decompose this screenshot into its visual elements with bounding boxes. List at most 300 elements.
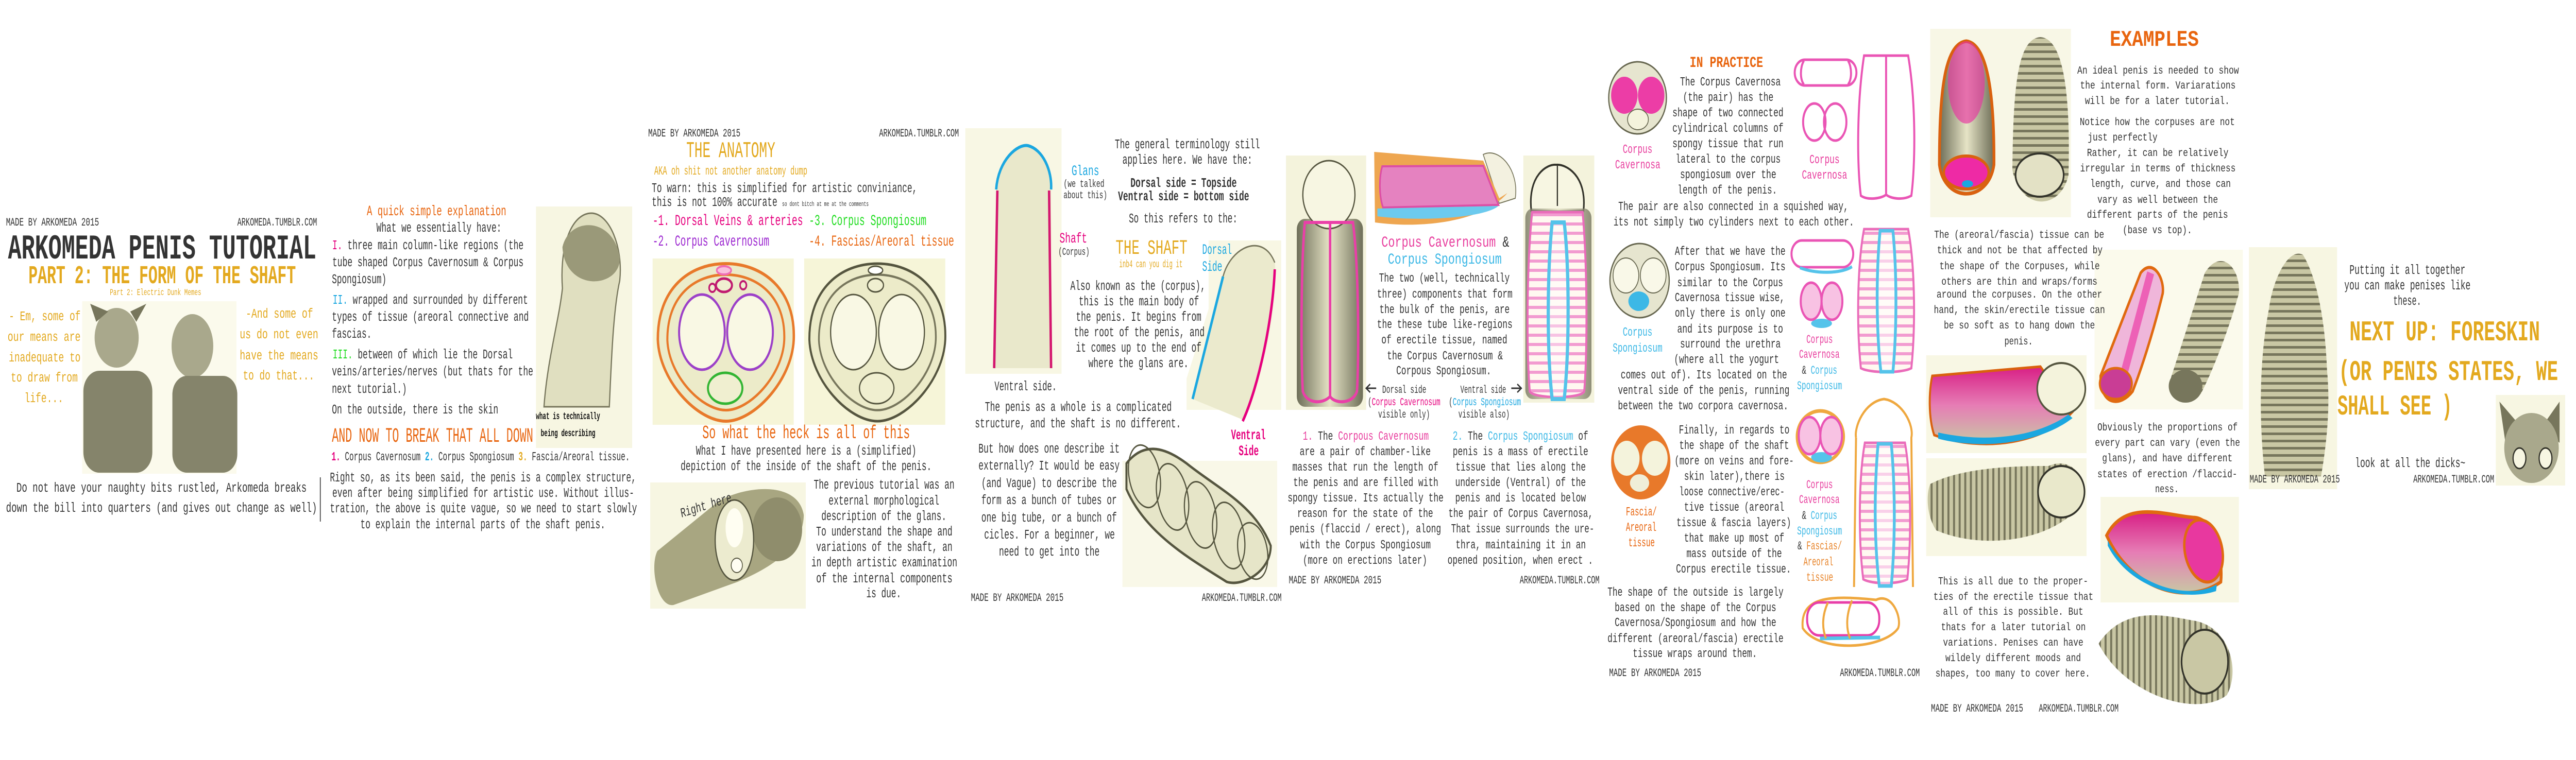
text: proportions: glans), and have different bbox=[2102, 452, 2232, 465]
example pair 2 bbox=[1926, 355, 2087, 556]
diagram: fascia section bbox=[1611, 425, 1670, 499]
definition: this is the main body of bbox=[1079, 295, 1199, 309]
text: ideal: vary as well between the bbox=[2097, 194, 2218, 206]
text: together: these. bbox=[2393, 294, 2421, 309]
definition: where the glans are. bbox=[1089, 356, 1189, 371]
credit line: ARKOMEDA.TUMBLR.COM bbox=[2039, 702, 2119, 715]
paragraph: in depth artistic examination bbox=[811, 556, 957, 571]
heading: Corpus Spongiosum bbox=[1388, 252, 1502, 269]
panel: corpus cavernosum and spongiosum bbox=[1286, 152, 1600, 587]
label: dorsal side bbox=[1368, 384, 1440, 421]
text: tissue: hand, the skin/erectile tissue can bbox=[1934, 304, 2105, 317]
text: proportions: every part can vary (even the bbox=[2095, 437, 2240, 450]
diagram: spongiosum section bbox=[1610, 244, 1669, 318]
text: proportions: Obviously the proportions of bbox=[2097, 421, 2238, 434]
text: ideal: An ideal penis is needed to show bbox=[2077, 64, 2239, 77]
text: cavernosa: (the pair) has the bbox=[1683, 91, 1773, 105]
text: spongiosum: (where all the yogurt bbox=[1674, 353, 1779, 367]
label: Corpus bbox=[1623, 326, 1652, 340]
right speech text: have the means bbox=[240, 349, 318, 364]
title: ARKOMEDA PENIS TUTORIAL bbox=[8, 230, 316, 269]
label: ventral side: visible also) bbox=[1459, 408, 1510, 421]
caption: what is technically bbox=[536, 411, 600, 423]
schematic: full layered form bbox=[1854, 399, 1913, 587]
numbered paragraph 1: the penis and are filled with bbox=[1293, 476, 1438, 490]
credit line: ARKOMEDA.TUMBLR.COM bbox=[1520, 574, 1600, 587]
text: cavernosa bbox=[1614, 76, 1854, 230]
text: spongiosum: Corpus Spongiosum. Its bbox=[1675, 261, 1786, 274]
warning: so dont bitch at me at the comments bbox=[782, 201, 869, 208]
paragraph: tration, the above is quite vague, so we need to start slowly bbox=[330, 502, 637, 516]
intro paragraph bbox=[6, 481, 317, 516]
numbered paragraph 1: 1. The Corpous Cavernosum bbox=[1303, 430, 1429, 444]
panel: the shaft bbox=[965, 128, 1282, 604]
diagram: ventral side view bbox=[965, 128, 1061, 374]
text: ideal: length, curve, and those can bbox=[2090, 178, 2231, 191]
text: fascia: tissue wraps around them. bbox=[1633, 647, 1757, 661]
intro text: The two (well, technically bbox=[1379, 272, 1510, 286]
text: tissue: penis. bbox=[2004, 335, 2033, 348]
text: fascia: Corpus erectile tissue. bbox=[1676, 563, 1791, 577]
text: fascia: different (areoral/fascia) erectile bbox=[1607, 632, 1784, 646]
labels: Glans bbox=[1072, 163, 1099, 180]
text: spongiosum: After that we have the bbox=[1675, 245, 1786, 259]
text: spongiosum: Cavernosa tissue wise, bbox=[1675, 291, 1785, 305]
label: dorsal side: Dorsal side bbox=[1382, 384, 1426, 396]
label: & Corpus bbox=[1802, 510, 1837, 523]
numbered explanation: fascias. bbox=[332, 327, 371, 342]
text: together bbox=[2344, 263, 2470, 309]
credit line: MADE BY ARKOMEDA 2015 bbox=[648, 127, 740, 140]
legend: -4. Fascias/Areoral tissue bbox=[809, 234, 954, 251]
label: Corpus bbox=[1809, 153, 1840, 167]
definition bbox=[975, 279, 1206, 431]
description bbox=[681, 444, 931, 474]
label: Corpus bbox=[1806, 334, 1833, 347]
heading: THE ANATOMY bbox=[686, 138, 775, 164]
caption: look at all the dicks~ bbox=[2355, 456, 2465, 471]
text: spongiosum: between the two corpora cavernosa. bbox=[1618, 400, 1788, 413]
paragraph: variations of the shaft, an bbox=[816, 540, 953, 555]
numbered paragraph 1: reason for the state of the bbox=[1297, 507, 1433, 521]
text: fascia: mass outside of the bbox=[1686, 547, 1782, 561]
numbered paragraph 2 bbox=[1448, 430, 1594, 568]
schematic: ring with fascia bbox=[1797, 411, 1843, 462]
text: tissue bbox=[1934, 229, 2105, 348]
intro text: three) components that form bbox=[1377, 288, 1513, 302]
intro text bbox=[1377, 272, 1513, 378]
diagram: side view bbox=[1187, 240, 1281, 421]
terminology: applies here. We have the: bbox=[1123, 153, 1252, 168]
example pair 4 bbox=[2098, 497, 2239, 704]
text: fascia: Finally, in regards to bbox=[1679, 424, 1789, 438]
text: spongiosum bbox=[1618, 245, 1789, 413]
label bbox=[1615, 143, 1660, 172]
text: closing: ties of the erectile tissue that bbox=[1934, 591, 2093, 603]
text: ideal: Rather, it can be relatively bbox=[2087, 147, 2228, 160]
numbered explanation: III. between of which lie the Dorsal bbox=[333, 348, 513, 362]
schematic: capsule and ring bbox=[1795, 60, 1856, 141]
text: spongiosum: surround the urethra bbox=[1680, 338, 1781, 352]
credit line: MADE BY ARKOMEDA 2015 bbox=[971, 592, 1063, 604]
text: spongiosum: only there is only one bbox=[1675, 307, 1786, 321]
text: cavernosa: length of the penis. bbox=[1677, 184, 1777, 198]
arrow: dorsal bbox=[1366, 384, 1376, 392]
legend bbox=[653, 213, 954, 251]
definition: structure, and the shaft is no different. bbox=[975, 417, 1181, 431]
text: ideal: the internal form. Variarations bbox=[2080, 79, 2235, 92]
numbered explanation: I. three main column-like regions (the bbox=[332, 238, 523, 253]
text: ideal bbox=[2077, 64, 2239, 237]
text: tissue: thick and not be that affected by bbox=[1937, 244, 2103, 257]
credit line bbox=[1289, 574, 1600, 587]
text: spongiosum: similar to the Corpus bbox=[1677, 277, 1783, 290]
small subtitle: Part 2: Electric Dunk Memes bbox=[110, 287, 201, 298]
heading: break down: AND NOW TO BREAK THAT ALL DOWN bbox=[332, 425, 533, 448]
text: fascia: Cavernosa/Spongiosum and how the bbox=[1615, 616, 1776, 630]
credit line: MADE BY ARKOMEDA 2015 bbox=[6, 216, 99, 229]
left speech text: to draw from bbox=[11, 371, 78, 386]
label: dorsal side: Side bbox=[1202, 259, 1222, 275]
numbered paragraph 1: are a pair of chamber-like bbox=[1300, 445, 1431, 459]
numbered paragraph 2: underside (Ventral) of the bbox=[1455, 476, 1586, 490]
left speech text: our means are bbox=[8, 330, 80, 345]
terminology: Dorsal side = Topside bbox=[1130, 176, 1236, 191]
question paragraph bbox=[978, 442, 1120, 560]
label: Spongiosum bbox=[1797, 525, 1842, 539]
numbered paragraph 2: penis is a mass of erectile bbox=[1453, 445, 1588, 459]
paragraph: The previous tutorial was an bbox=[814, 478, 955, 493]
numbered paragraph 1 bbox=[1287, 430, 1444, 568]
label: Cavernosa bbox=[1802, 169, 1848, 183]
numbered paragraph 1: penis (flaccid / erect), along bbox=[1290, 523, 1441, 537]
label: Fascia/ bbox=[1626, 506, 1657, 520]
text: fascia: that make up most of bbox=[1684, 532, 1784, 546]
definition: the penis. It begins from bbox=[1076, 310, 1201, 325]
text: ideal: different parts of the penis bbox=[2087, 209, 2228, 221]
left speech text: life... bbox=[24, 391, 63, 406]
numbered paragraph 1: spongy tissue. Its actually the bbox=[1287, 492, 1444, 506]
text: ideal: (base vs top). bbox=[2123, 224, 2192, 237]
panel: title and introduction bbox=[6, 216, 320, 522]
heading bbox=[1381, 235, 1510, 269]
paragraph bbox=[811, 478, 957, 601]
labels bbox=[1058, 163, 1107, 258]
label: dorsal side: visible only) bbox=[1378, 408, 1430, 421]
numbered paragraph 1: with the Corpus Spongiosum bbox=[1300, 539, 1431, 552]
schematic: cavernosa outline bbox=[1858, 56, 1914, 199]
caption: being describing bbox=[541, 428, 595, 440]
intro text: of erectile tissue, named bbox=[1381, 334, 1507, 348]
label: Areoral bbox=[1804, 556, 1833, 569]
caption bbox=[536, 411, 600, 440]
text: fascia: loose connective/erec- bbox=[1679, 486, 1785, 499]
label bbox=[1802, 153, 1848, 183]
numbered paragraph 2: thra, maintaining it in an bbox=[1455, 539, 1586, 552]
label: Corpus bbox=[1623, 143, 1652, 157]
arrow: ventral bbox=[1511, 384, 1521, 392]
credit line bbox=[6, 216, 317, 229]
numbered paragraph 1: (more on erections later) bbox=[1303, 554, 1427, 568]
labels: Shaft bbox=[1059, 231, 1087, 247]
paragraph: even after being simplified for artistic use. Without illus- bbox=[332, 486, 634, 501]
credit line: ARKOMEDA.TUMBLR.COM bbox=[1840, 667, 1920, 680]
paragraph bbox=[330, 471, 637, 532]
credit line: MADE BY ARKOMEDA 2015 bbox=[2250, 473, 2340, 486]
sketch: finished form bbox=[2249, 247, 2337, 489]
numbered paragraph 2: 2. The Corpus Spongiosum of bbox=[1453, 430, 1588, 444]
numbered explanation: next tutorial.) bbox=[332, 382, 407, 397]
heading: THE SHAFT bbox=[1115, 237, 1188, 260]
label bbox=[1797, 334, 1842, 393]
heading: IN PRACTICE bbox=[1690, 55, 1763, 72]
label bbox=[1797, 479, 1842, 585]
text: tissue: be so soft as to hang down the bbox=[1944, 319, 2095, 332]
text: cavernosa: spongy tissue that run bbox=[1672, 137, 1784, 151]
label bbox=[1613, 326, 1663, 356]
next up heading: (OR PENIS STATES, WE bbox=[2338, 356, 2558, 389]
text: ideal: will be for a later tutorial. bbox=[2085, 95, 2230, 108]
intro text: the bulk of the penis, are bbox=[1379, 303, 1510, 317]
numbered paragraph 2: opened position, when erect . bbox=[1448, 554, 1593, 568]
label: dorsal side: Dorsal bbox=[1202, 242, 1232, 258]
terminology: The general terminology still bbox=[1115, 137, 1260, 152]
label: Corpus bbox=[1806, 479, 1833, 492]
label: Cavernosa bbox=[1799, 349, 1840, 362]
label: dorsal side bbox=[1202, 242, 1232, 275]
intro text: the Corpus Cavernosum & bbox=[1387, 350, 1503, 364]
example pair 1 bbox=[1930, 29, 2071, 217]
sub heading: inb4 can you dig it bbox=[1119, 259, 1182, 271]
next up heading bbox=[2337, 317, 2558, 423]
subtitle: PART 2: THE FORM OF THE SHAFT bbox=[28, 263, 296, 291]
left speech text: - Em, some of bbox=[9, 309, 80, 324]
next up heading: NEXT UP: FORESKIN bbox=[2349, 317, 2540, 349]
label: ventral side bbox=[1231, 427, 1265, 460]
numbered explanation: What we essentially have: bbox=[377, 221, 501, 236]
text: fascia: skin later),there is bbox=[1684, 470, 1785, 484]
text: fascia: The shape of the outside is largely bbox=[1607, 586, 1784, 600]
paragraph: Right so, as its been said, the penis is a complex structure, bbox=[330, 471, 636, 486]
panel: the anatomy bbox=[648, 127, 959, 609]
heading: So what the heck is all of this bbox=[702, 423, 910, 444]
diagram: ventral view bbox=[1523, 156, 1594, 403]
numbered paragraph 2: That issue surrounds the ure- bbox=[1451, 523, 1594, 537]
text: fascia bbox=[1607, 424, 1794, 661]
text: tissue: The (areoral/fascia) tissue can be bbox=[1934, 229, 2104, 241]
illustration: two clothed cartoon characters bbox=[82, 301, 238, 474]
text: spongiosum: comes out of). Its located on the bbox=[1621, 369, 1787, 383]
credit line bbox=[971, 592, 1282, 604]
numbered explanation: On the outside, there is the skin bbox=[332, 403, 498, 418]
sketch: rings along a tube bbox=[1123, 440, 1277, 587]
text: together: Putting it all together bbox=[2349, 263, 2465, 278]
sub heading: AKA oh shit not another anatomy dump bbox=[654, 165, 807, 179]
text: fascia: tive tissue (areoral bbox=[1684, 501, 1784, 515]
warning: this is not 100% accurate bbox=[652, 195, 777, 210]
numbered explanation: tube shaped Corpus Cavernosum & Corpus bbox=[332, 255, 523, 270]
diagram: coloured cross section bbox=[653, 258, 794, 425]
diagram: cavernosa section bbox=[1608, 62, 1667, 134]
right speech text: us do not even bbox=[240, 327, 318, 342]
label: ventral side bbox=[1449, 384, 1521, 421]
question paragraph: need to get into the bbox=[999, 545, 1099, 560]
text: closing: thats for a later tutorial on bbox=[1941, 621, 2086, 634]
text: spongiosum: and its purpose is to bbox=[1677, 323, 1783, 337]
panel: next up bbox=[2249, 247, 2565, 489]
text: closing: all of this is possible. But bbox=[1943, 606, 2083, 618]
diagram: dorsal view bbox=[1286, 156, 1366, 410]
credit line: ARKOMEDA.TUMBLR.COM bbox=[238, 216, 317, 229]
label bbox=[1626, 506, 1657, 550]
paragraph: description of the glans. bbox=[821, 509, 946, 524]
text: together: you can make penises like bbox=[2344, 279, 2470, 293]
warning bbox=[652, 181, 917, 210]
numbered paragraph 1: masses that run the length of bbox=[1293, 461, 1438, 475]
left speech text: inadequate to bbox=[9, 351, 80, 366]
question paragraph: cicles. For a beginner, we bbox=[984, 528, 1115, 543]
text: tissue: others are thin and wraps/forms bbox=[1941, 275, 2097, 288]
numbered paragraph 2: penis and is located below bbox=[1455, 492, 1586, 506]
text: closing: This is all due to the proper- bbox=[1938, 575, 2088, 588]
numbered explanation: II. wrapped and surrounded by different bbox=[333, 293, 528, 308]
label: ventral side: Ventral bbox=[1231, 427, 1265, 444]
question paragraph: form as a bunch of tubes or bbox=[981, 493, 1117, 508]
key: 1. Corpus Cavernosum 2. Corpus Spongiosum 3. Fascia/Areoral tissue. bbox=[331, 451, 630, 464]
definition: Ventral side. bbox=[994, 379, 1057, 394]
credit line: MADE BY ARKOMEDA 2015 bbox=[1609, 667, 1701, 680]
label: right here: Right here bbox=[680, 491, 733, 522]
text: closing bbox=[1934, 575, 2093, 680]
panel: quick explanation bbox=[330, 203, 637, 532]
text: cavernosa: The Corpus Cavernosa bbox=[1680, 76, 1781, 90]
left speech text bbox=[8, 309, 80, 406]
example pair 3 bbox=[2095, 250, 2243, 409]
label: & Fascias/ bbox=[1798, 540, 1842, 554]
right speech text bbox=[240, 307, 318, 384]
labels: about this) bbox=[1063, 190, 1107, 202]
label: ventral side: Ventral side bbox=[1461, 384, 1506, 396]
intro text: Corpous Spongiosum. bbox=[1396, 365, 1491, 378]
paragraph: To understand the shape and bbox=[816, 525, 953, 540]
schematic: striped with column bbox=[1858, 229, 1914, 372]
diagram: side section bbox=[1374, 152, 1516, 224]
paragraph: to explain the internal parts of the shaft penis. bbox=[361, 517, 605, 532]
text: closing: wildely different moods and bbox=[1945, 652, 2081, 665]
label: Areoral bbox=[1626, 521, 1656, 535]
right speech text: to do that... bbox=[243, 369, 314, 384]
label: ventral side: (Corpus Spongiosum bbox=[1449, 396, 1521, 409]
credit line: MADE BY ARKOMEDA 2015 bbox=[1931, 702, 2023, 715]
legend: -2. Corpus Cavernosum bbox=[653, 234, 769, 251]
credit line bbox=[648, 127, 959, 140]
text: proportions bbox=[2095, 421, 2240, 496]
text: fascia: based on the shape of the Corpus bbox=[1615, 601, 1776, 615]
terminology bbox=[1115, 137, 1260, 227]
text: cavernosa: spongiosum over the bbox=[1680, 168, 1776, 182]
credit line bbox=[2250, 473, 2494, 486]
text: proportions: ness. bbox=[2155, 483, 2179, 496]
terminology: So this refers to the: bbox=[1129, 212, 1238, 227]
labels: (Corpus) bbox=[1058, 247, 1090, 258]
numbered explanation: veins/arteries/nerves (but thats for the bbox=[332, 365, 533, 379]
schematic: capsule and ring with spongiosum bbox=[1791, 240, 1853, 328]
illustration: character face bbox=[2496, 395, 2565, 486]
labels: (we talked bbox=[1063, 179, 1105, 191]
text: cavernosa: cylindrical columns of bbox=[1672, 122, 1784, 136]
question paragraph: one big tube, or a bunch of bbox=[981, 511, 1117, 526]
text: fascia: (more on veins and fore- bbox=[1674, 455, 1794, 469]
credit line: MADE BY ARKOMEDA 2015 bbox=[1289, 574, 1381, 587]
text: cavernosa: The pair are also connected in a squished way, bbox=[1618, 200, 1849, 214]
paragraph: of the internal components bbox=[816, 572, 953, 586]
label: tissue bbox=[1806, 572, 1833, 585]
text: cavernosa: its not simply two cylinders next to each other. bbox=[1614, 216, 1854, 230]
text: spongiosum: ventral side of the penis, running bbox=[1618, 384, 1789, 398]
label: tissue bbox=[1629, 537, 1655, 550]
text: tissue: around the corpuses. On the other bbox=[1937, 288, 2102, 301]
text: cavernosa: shape of two connected bbox=[1672, 107, 1784, 120]
text: fascia: the shape of the shaft bbox=[1679, 439, 1789, 453]
intro paragraph: Do not have your naughty bits rustled, Arkomeda breaks bbox=[16, 481, 307, 496]
sketch: right here section bbox=[650, 482, 806, 609]
legend: -1. Dorsal Veins & arteries bbox=[653, 213, 803, 230]
panel: in practice bbox=[1607, 55, 1920, 680]
text: tissue: the shape of the Corpuses, while bbox=[1939, 260, 2100, 273]
definition: it comes up to the end of bbox=[1076, 341, 1201, 356]
paragraph: external morphological bbox=[828, 494, 939, 509]
label: Spongiosum bbox=[1613, 342, 1663, 356]
question paragraph: externally? It would be easy bbox=[978, 459, 1120, 474]
text: ideal: just perfectly bbox=[2088, 131, 2158, 144]
schematic: side layered form bbox=[1803, 598, 1899, 646]
intro paragraph: down the bill into quarters (and gives out change as well) bbox=[6, 501, 317, 516]
numbered paragraph 2: tissue that lies along the bbox=[1455, 461, 1586, 475]
intro text: the these tube like-regions bbox=[1377, 318, 1513, 332]
label: ventral side: Side bbox=[1239, 443, 1259, 460]
text: ideal: irregular in terms of thickness bbox=[2080, 162, 2235, 175]
label: Cavernosa bbox=[1799, 494, 1840, 507]
text: fascia: tissue & fascia layers) bbox=[1676, 516, 1791, 530]
warning: To warn: this is simplified for artistic conviniance, bbox=[652, 181, 917, 196]
credit line: ARKOMEDA.TUMBLR.COM bbox=[879, 127, 959, 140]
credit line bbox=[1931, 702, 2119, 715]
definition: the root of the penis, and bbox=[1074, 325, 1205, 340]
sketch: shaft form study bbox=[536, 206, 632, 448]
panel: examples bbox=[1926, 27, 2243, 715]
heading: A quick simple explanation bbox=[367, 203, 506, 220]
text: closing: variations. Penises can have bbox=[1943, 636, 2083, 649]
numbered explanation: Spongiosum) bbox=[332, 272, 386, 287]
label: & Corpus bbox=[1802, 365, 1837, 378]
label: dorsal side: (Corpus Cavernosum bbox=[1368, 396, 1440, 409]
credit line bbox=[1609, 667, 1920, 680]
legend: -3. Corpus Spongiosum bbox=[809, 213, 926, 230]
paragraph: is due. bbox=[866, 586, 901, 601]
numbered explanation: types of tissue (areoral connective and bbox=[332, 310, 529, 325]
question paragraph: But how does one describe it bbox=[978, 442, 1120, 457]
description: depiction of the inside of the shaft of the penis. bbox=[681, 459, 931, 474]
label: Cavernosa bbox=[1615, 159, 1660, 172]
heading: Corpus Cavernosum & bbox=[1381, 235, 1510, 252]
credit line: ARKOMEDA.TUMBLR.COM bbox=[1202, 592, 1282, 604]
numbered explanation bbox=[332, 221, 533, 418]
numbered paragraph 2: the pair of Corpus Cavernosa, bbox=[1448, 507, 1593, 521]
right speech text: -And some of bbox=[246, 307, 313, 322]
text: cavernosa: lateral to the corpus bbox=[1675, 153, 1781, 167]
label: Spongiosum bbox=[1797, 380, 1842, 393]
text: proportions: states of erection /flaccid- bbox=[2097, 468, 2238, 481]
